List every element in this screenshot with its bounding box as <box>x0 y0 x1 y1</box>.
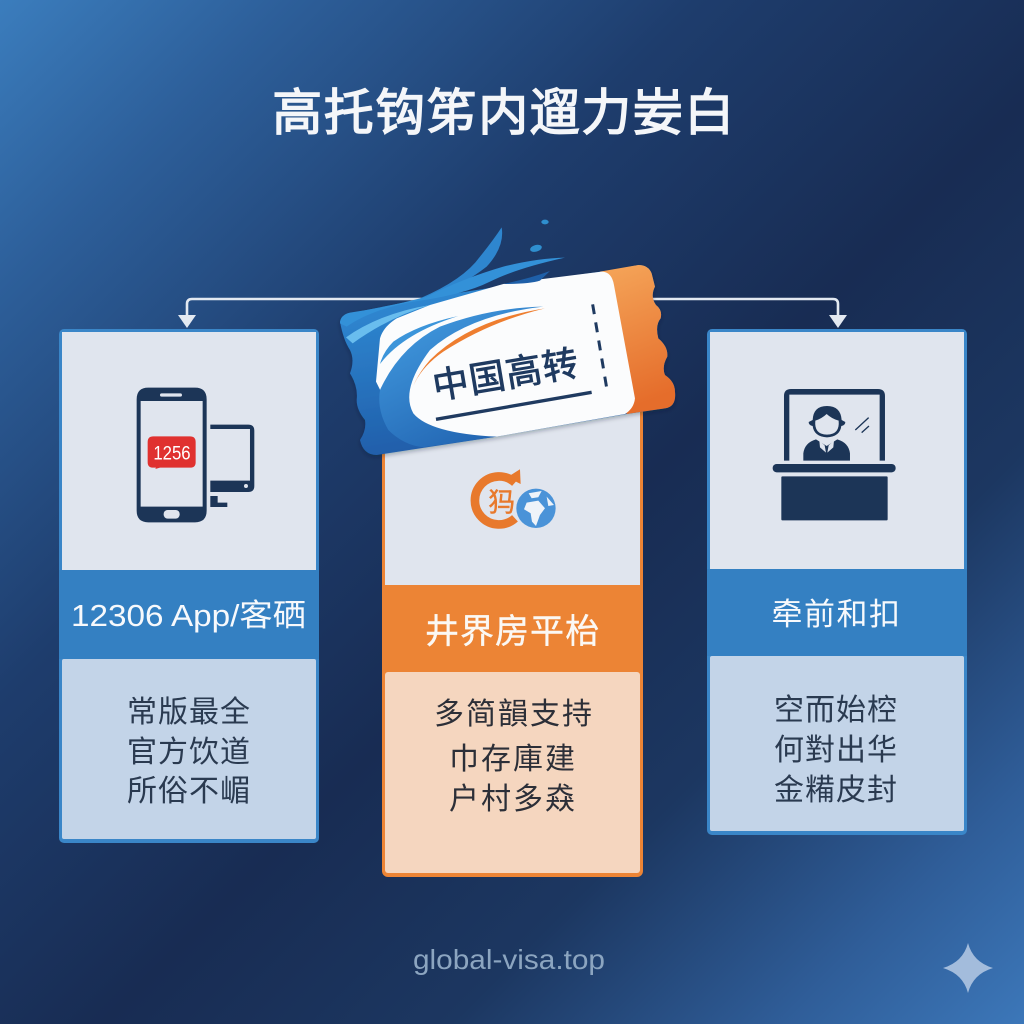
ticket white face <box>376 272 635 440</box>
center card body <box>385 672 640 873</box>
panel: left card <box>59 329 319 843</box>
connector arrows <box>178 299 847 328</box>
center card image area <box>385 400 640 585</box>
orange swoosh <box>413 308 545 386</box>
icon: sparkle star <box>943 943 993 993</box>
right card text: 何對出华 <box>774 734 898 767</box>
ticket underline <box>436 392 592 419</box>
icon: red 1256 badge: 1256 <box>153 444 191 465</box>
icon: rotating arrow and globe: 犸 <box>488 488 515 518</box>
upper blue stripe <box>380 316 458 364</box>
panel: right card <box>707 329 967 835</box>
left card header bar <box>59 570 319 659</box>
right card image area <box>710 332 964 569</box>
blue swoosh <box>379 307 543 447</box>
flames <box>340 220 565 343</box>
right card header bar <box>707 569 967 656</box>
left card text: 所俗不嵋 <box>127 775 251 808</box>
center card text: 户村多猋 <box>449 783 577 816</box>
panel: center card <box>382 400 643 877</box>
right card text <box>774 694 898 807</box>
footer website: global-visa.top <box>413 944 605 975</box>
left card text: 常版最全 <box>127 696 251 729</box>
ticket orange stub <box>600 265 675 414</box>
ticket dashed perforation <box>593 304 607 392</box>
center card header bar <box>382 585 643 672</box>
ticket body <box>340 265 675 455</box>
left card image area <box>62 332 316 570</box>
ticket label: 中国高转 <box>430 342 582 407</box>
right card heading: 牵前和扣 <box>772 597 902 632</box>
right card text: 空而始椌 <box>774 694 898 727</box>
icon: phone and monitor <box>137 388 254 522</box>
right card text: 金糒皮封 <box>774 774 898 807</box>
icon: rotating arrow and globe <box>475 469 557 528</box>
center card text <box>434 698 594 816</box>
ticket <box>340 220 675 455</box>
center card text: 多简韻支持 <box>434 698 594 731</box>
center card text: 巾存庫建 <box>449 743 577 776</box>
left card heading: 12306 App/客硒 <box>71 598 306 633</box>
right card body <box>710 656 964 831</box>
left card body <box>62 659 316 839</box>
title: 高托钩笫内遛力妛白 <box>272 85 736 141</box>
left card text: 官方饮道 <box>127 736 251 769</box>
center card heading: 井界房平枱 <box>425 613 600 651</box>
left card text <box>127 696 251 808</box>
icon: service counter with agent <box>773 389 896 520</box>
